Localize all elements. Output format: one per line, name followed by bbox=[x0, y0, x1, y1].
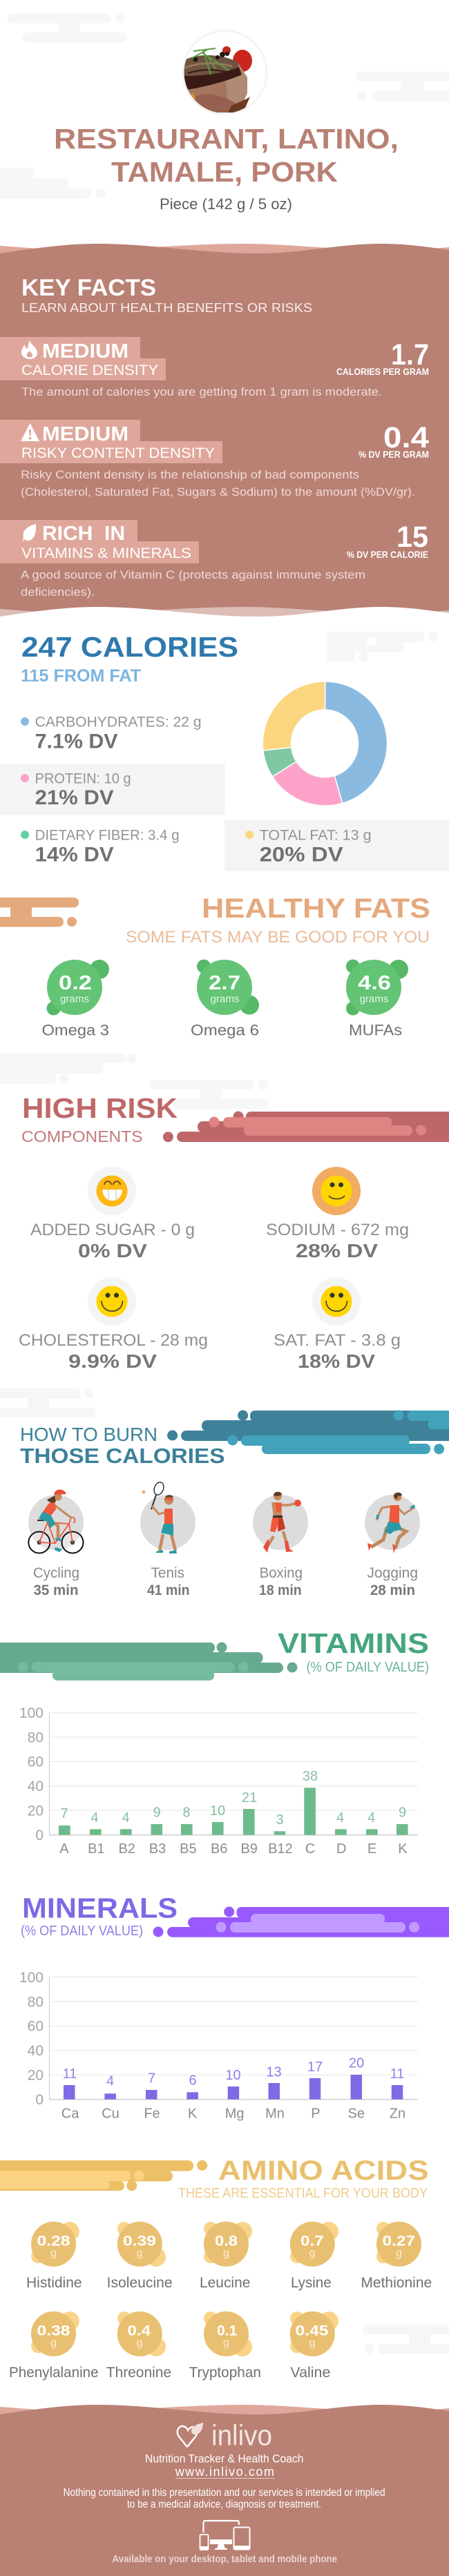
amino: histidine: g bbox=[50, 2247, 57, 2259]
bar chart: vitamins: B9 bbox=[240, 1841, 258, 1857]
legend: carbohydrates: 7.1% DV bbox=[35, 730, 118, 753]
decoration: minerals banner bbox=[153, 1907, 449, 1937]
title bbox=[54, 123, 399, 188]
amino: tryptophan: g bbox=[223, 2337, 229, 2349]
disclaimer: to be a medical advice, diagnosis or treatment. bbox=[127, 2499, 321, 2510]
bar chart: vitamins: 20 bbox=[28, 1803, 44, 1819]
icon: flame bbox=[21, 340, 37, 359]
activity: boxing: 18 min bbox=[259, 1582, 302, 1598]
amino: valine: g bbox=[309, 2337, 315, 2349]
activity: cycling: Cycling bbox=[33, 1565, 79, 1581]
amino: isoleucine bbox=[107, 2222, 173, 2291]
bar chart: minerals: Fe bbox=[144, 2107, 160, 2122]
bar chart: minerals: 20 bbox=[28, 2067, 44, 2083]
legend: total fat: 20% DV bbox=[260, 843, 343, 866]
background cloud: calories bbox=[327, 632, 438, 662]
bar chart: vitamins: 80 bbox=[28, 1730, 44, 1745]
bar chart: minerals: 10 bbox=[225, 2068, 241, 2083]
panel: key facts bbox=[0, 244, 449, 623]
badge: omega 6: grams bbox=[210, 993, 239, 1005]
bar chart: minerals: 6 bbox=[189, 2073, 197, 2088]
bar chart: vitamins: 40 bbox=[28, 1779, 44, 1794]
activity: boxing bbox=[253, 1492, 308, 1598]
bar chart: minerals: 60 bbox=[28, 2019, 44, 2035]
key facts heading bbox=[21, 275, 312, 315]
icon: devices bbox=[200, 2521, 250, 2550]
icon: boxer bbox=[263, 1492, 301, 1553]
item: added sugar: ADDED SUGAR - 0 g bbox=[30, 1221, 195, 1239]
bar chart: vitamins: K bbox=[398, 1841, 408, 1857]
amino: isoleucine: Isoleucine bbox=[107, 2275, 173, 2291]
calories heading: 247 CALORIES bbox=[21, 631, 238, 663]
icon: runner bbox=[367, 1493, 415, 1553]
item: added sugar bbox=[30, 1167, 195, 1261]
amino: threonine bbox=[106, 2312, 171, 2381]
amino: phenylalanine: 0.38 bbox=[37, 2323, 70, 2338]
bar chart: vitamins: 3 bbox=[276, 1812, 284, 1828]
background cloud: above high risk banner bbox=[149, 1080, 269, 1109]
background cloud: below healthy fats bbox=[0, 1054, 136, 1084]
bar chart: vitamins: D bbox=[336, 1841, 346, 1857]
bar chart: minerals: Ca bbox=[61, 2107, 79, 2122]
subheading: (% OF DAILY VALUE) bbox=[21, 1924, 143, 1939]
fact: calorie density: CALORIE DENSITY bbox=[21, 362, 158, 378]
icon: tennis player bbox=[142, 1481, 177, 1553]
fact: rich in vitamins and minerals: A good source of Vitamin C (protects against immune system bbox=[21, 568, 365, 581]
bar chart: minerals: 0 bbox=[35, 2092, 44, 2108]
bar chart: vitamins: 38 bbox=[303, 1769, 318, 1784]
footer bbox=[0, 2405, 449, 2576]
disclaimer bbox=[64, 2487, 385, 2510]
fact: risky content density: 0.4 bbox=[383, 421, 429, 454]
amino: phenylalanine bbox=[9, 2312, 99, 2381]
legend: total fat bbox=[224, 820, 449, 871]
bar chart: minerals: 11 bbox=[63, 2066, 77, 2082]
fact: rich in vitamins and minerals: VITAMINS & MINERALS bbox=[21, 545, 191, 561]
bar chart: vitamins: 21 bbox=[242, 1790, 257, 1805]
item: sodium bbox=[266, 1167, 409, 1261]
amino: lysine: 0.7 bbox=[300, 2234, 323, 2249]
amino: methionine: 0.27 bbox=[383, 2234, 415, 2249]
subheading: SOME FATS MAY BE GOOD FOR YOU bbox=[126, 928, 430, 947]
amino: valine: 0.45 bbox=[296, 2323, 329, 2338]
bar chart: minerals: 40 bbox=[28, 2043, 44, 2059]
activity: jogging: 28 min bbox=[370, 1582, 415, 1598]
background cloud: top left bbox=[8, 14, 127, 42]
fact: calorie density: MEDIUM bbox=[42, 340, 128, 362]
fact: rich in vitamins and minerals: RICH IN bbox=[42, 523, 125, 545]
item: added sugar: 0% DV bbox=[78, 1240, 147, 1261]
key facts heading: KEY FACTS bbox=[21, 275, 156, 301]
legend: carbohydrates: CARBOHYDRATES: 22 g bbox=[35, 715, 202, 730]
bar chart: minerals: 4 bbox=[106, 2074, 114, 2089]
amino: valine bbox=[290, 2312, 338, 2381]
website link: www.inlivo.com bbox=[175, 2465, 274, 2479]
bar chart: minerals: K bbox=[188, 2107, 198, 2122]
amino: phenylalanine: Phenylalanine bbox=[9, 2365, 99, 2381]
legend: dietary fiber: DIETARY FIBER: 3.4 g bbox=[35, 828, 180, 844]
food photo bbox=[182, 30, 268, 115]
bar chart: vitamins: B1 bbox=[88, 1841, 105, 1857]
title: RESTAURANT, LATINO, bbox=[54, 123, 399, 155]
panel: high risk components bbox=[19, 1092, 449, 1372]
background cloud: above burn section bbox=[0, 1388, 96, 1417]
amino: methionine bbox=[361, 2222, 432, 2291]
bar chart: vitamins: C bbox=[305, 1841, 315, 1857]
amino: phenylalanine: g bbox=[50, 2337, 57, 2349]
background cloud: right of amino acids bbox=[362, 2325, 449, 2354]
decoration: high risk banner bbox=[163, 1112, 449, 1142]
heading: HEALTHY FATS bbox=[202, 893, 430, 924]
donut chart bbox=[262, 681, 388, 806]
amino: lysine: Lysine bbox=[291, 2275, 332, 2291]
bar chart: vitamins: B5 bbox=[180, 1841, 197, 1857]
badge: mufas: grams bbox=[359, 993, 388, 1005]
fact: calorie density: 1.7 bbox=[391, 338, 429, 371]
amino: threonine: Threonine bbox=[106, 2365, 171, 2381]
bar chart: minerals: 80 bbox=[28, 1994, 44, 2010]
bar chart: vitamins: 100 bbox=[19, 1705, 44, 1721]
disclaimer: Nothing contained in this presentation and our services is intended or implied bbox=[64, 2487, 385, 2499]
amino: methionine: Methionine bbox=[361, 2275, 432, 2291]
bar chart: vitamins: 60 bbox=[28, 1754, 44, 1770]
activity: cycling: 35 min bbox=[33, 1582, 79, 1598]
item: saturated fat: 18% DV bbox=[298, 1350, 375, 1372]
bar chart: minerals: Cu bbox=[102, 2107, 120, 2122]
amino: tryptophan: 0.1 bbox=[217, 2323, 238, 2338]
subheading: COMPONENTS bbox=[21, 1127, 142, 1145]
bar chart: minerals bbox=[19, 1970, 418, 2122]
bar chart: vitamins: 7 bbox=[60, 1806, 68, 1821]
heading: THOSE CALORIES bbox=[20, 1444, 225, 1468]
panel: amino acids bbox=[0, 2156, 432, 2381]
activity: cycling bbox=[28, 1489, 84, 1598]
logo: inlivo: inlivo bbox=[211, 2419, 272, 2452]
bar chart: minerals: 7 bbox=[148, 2071, 155, 2086]
item: cholesterol bbox=[19, 1277, 208, 1372]
bar chart: vitamins: 10 bbox=[210, 1803, 225, 1819]
badge: omega 6: Omega 6 bbox=[191, 1022, 259, 1038]
logo: inlivo bbox=[178, 2419, 272, 2452]
activity: jogging: Jogging bbox=[367, 1565, 418, 1581]
fact: risky content density: (Cholesterol, Saturated Fat, Sugars & Sodium) to the amount (%DV/gr). bbox=[21, 485, 415, 498]
serving size: Piece (142 g / 5 oz) bbox=[160, 195, 292, 213]
icon: smiling face bbox=[97, 1286, 127, 1317]
heading bbox=[20, 1424, 225, 1468]
decoration: vitamins banner bbox=[0, 1642, 297, 1681]
panel: minerals bbox=[19, 1892, 449, 2122]
bar chart: vitamins: A bbox=[59, 1841, 69, 1857]
amino: lysine: g bbox=[309, 2247, 315, 2259]
icon: cyclist bbox=[28, 1489, 83, 1553]
subheading: THESE ARE ESSENTIAL FOR YOUR BODY bbox=[178, 2186, 428, 2201]
legend: dietary fiber bbox=[21, 828, 180, 866]
item: cholesterol: 9.9% DV bbox=[68, 1350, 157, 1372]
badge: mufas: 4.6 bbox=[358, 972, 391, 994]
amino: leucine: 0.8 bbox=[215, 2234, 238, 2249]
bar chart: vitamins bbox=[19, 1705, 418, 1857]
fact: risky content density: % DV PER GRAM bbox=[359, 449, 429, 460]
panel: calories bbox=[0, 631, 449, 871]
subheading: (% OF DAILY VALUE) bbox=[307, 1660, 429, 1675]
amino: threonine: g bbox=[137, 2337, 142, 2349]
fact: rich in vitamins and minerals: 15 bbox=[397, 521, 428, 554]
amino: leucine: g bbox=[223, 2247, 229, 2259]
bar chart: vitamins: 9 bbox=[153, 1805, 161, 1821]
icon: smiling face bbox=[321, 1286, 352, 1317]
amino: histidine bbox=[26, 2222, 82, 2291]
heading: AMINO ACIDS bbox=[218, 2156, 429, 2186]
activity: tennis: 41 min bbox=[147, 1582, 189, 1598]
panel: vitamins bbox=[0, 1627, 429, 1857]
bar chart: vitamins: B2 bbox=[118, 1841, 135, 1857]
amino: methionine: g bbox=[396, 2247, 402, 2259]
decoration: burn banner bbox=[167, 1410, 449, 1454]
fact: calorie density: The amount of calories you are getting from 1 gram is moderate. bbox=[21, 385, 382, 398]
item: cholesterol: CHOLESTEROL - 28 mg bbox=[19, 1331, 208, 1350]
amino: tryptophan bbox=[189, 2312, 261, 2381]
legend: protein: PROTEIN: 10 g bbox=[35, 771, 131, 787]
activity: tennis bbox=[140, 1481, 195, 1598]
fact: rich in vitamins and minerals bbox=[0, 520, 428, 599]
amino: leucine bbox=[200, 2222, 252, 2291]
badge: omega 6: 2.7 bbox=[209, 972, 240, 994]
amino: tryptophan: Tryptophan bbox=[189, 2365, 261, 2381]
badge: mufas: MUFAs bbox=[349, 1022, 402, 1038]
activity: tennis: Tenis bbox=[151, 1565, 184, 1581]
bar chart: minerals: Zn bbox=[390, 2107, 405, 2122]
bar chart: minerals: 20 bbox=[349, 2056, 364, 2071]
heading: MINERALS bbox=[22, 1892, 178, 1924]
item: saturated fat: SAT. FAT - 3.8 g bbox=[274, 1331, 401, 1350]
bar chart: minerals: Se bbox=[348, 2107, 365, 2122]
badge: omega 3 bbox=[41, 960, 109, 1038]
badge: mufas bbox=[346, 960, 408, 1038]
key facts heading: LEARN ABOUT HEALTH BENEFITS OR RISKS bbox=[21, 301, 312, 315]
bar chart: vitamins: 9 bbox=[399, 1805, 406, 1821]
activity: jogging bbox=[365, 1493, 420, 1598]
bar chart: minerals: Mg bbox=[225, 2107, 244, 2122]
badge: omega 3: Omega 3 bbox=[41, 1022, 109, 1038]
bar chart: minerals: 13 bbox=[266, 2064, 282, 2080]
bar chart: vitamins: B12 bbox=[268, 1841, 293, 1857]
amino: lysine bbox=[290, 2222, 338, 2291]
icon: grinning face bbox=[97, 1175, 127, 1207]
heading: HIGH RISK bbox=[22, 1092, 178, 1124]
tagline: Nutrition Tracker & Health Coach bbox=[145, 2452, 304, 2466]
bar chart: vitamins: B3 bbox=[149, 1841, 166, 1857]
amino: histidine: 0.28 bbox=[37, 2234, 70, 2249]
availability note: Available on your desktop, tablet and mobile phone bbox=[112, 2553, 337, 2565]
fact: calorie density bbox=[0, 337, 429, 398]
item: saturated fat bbox=[274, 1277, 401, 1372]
activity: boxing: Boxing bbox=[260, 1565, 303, 1581]
legend: protein: 21% DV bbox=[35, 786, 114, 809]
legend: protein bbox=[0, 764, 225, 815]
bar chart: vitamins: E bbox=[367, 1841, 376, 1857]
heading: HOW TO BURN bbox=[20, 1424, 157, 1445]
fact: rich in vitamins and minerals: % DV PER CALORIE bbox=[347, 550, 428, 560]
panel: healthy fats bbox=[0, 893, 430, 1038]
fact: risky content density: RISKY CONTENT DENSITY bbox=[21, 445, 215, 461]
fact: risky content density bbox=[0, 420, 429, 498]
bar chart: vitamins: B6 bbox=[211, 1841, 227, 1857]
background cloud: top right bbox=[356, 72, 449, 101]
badge: omega 3: grams bbox=[60, 993, 89, 1005]
icon: smiling face bbox=[321, 1175, 352, 1207]
decoration: healthy fats banner bbox=[0, 898, 79, 927]
badge: omega 6 bbox=[191, 960, 259, 1038]
legend: total fat: TOTAL FAT: 13 g bbox=[260, 828, 372, 844]
item: sodium: SODIUM - 672 mg bbox=[266, 1221, 409, 1239]
icon: warning triangle bbox=[21, 423, 39, 441]
fact: calorie density: CALORIES PER GRAM bbox=[336, 367, 429, 377]
bar chart: vitamins: 4 bbox=[122, 1810, 130, 1826]
bar chart: vitamins: 4 bbox=[367, 1810, 375, 1826]
amino: valine: Valine bbox=[290, 2365, 330, 2381]
bar chart: minerals: 100 bbox=[19, 1970, 44, 1986]
decoration: amino acids banner bbox=[0, 2160, 207, 2191]
title: TAMALE, PORK bbox=[111, 156, 338, 188]
badge: omega 3: 0.2 bbox=[59, 972, 92, 994]
fact: risky content density: MEDIUM bbox=[42, 423, 128, 445]
legend: dietary fiber: 14% DV bbox=[35, 843, 114, 866]
amino: isoleucine: g bbox=[137, 2247, 142, 2259]
bar chart: vitamins: 4 bbox=[90, 1810, 99, 1826]
bar chart: minerals: P bbox=[311, 2107, 321, 2122]
bar chart: vitamins: 8 bbox=[182, 1805, 191, 1821]
amino: isoleucine: 0.39 bbox=[123, 2234, 156, 2249]
heading: VITAMINS bbox=[278, 1627, 429, 1659]
calories from fat: 115 FROM FAT bbox=[21, 666, 141, 686]
background cloud: left of serving text bbox=[0, 168, 106, 199]
bar chart: minerals: Mn bbox=[265, 2107, 285, 2122]
icon: leaf bbox=[23, 524, 36, 541]
bar chart: vitamins: 4 bbox=[336, 1810, 344, 1826]
bar chart: minerals: 17 bbox=[307, 2060, 323, 2075]
amino: leucine: Leucine bbox=[200, 2275, 250, 2291]
legend: carbohydrates bbox=[21, 715, 202, 753]
item: sodium: 28% DV bbox=[296, 1240, 378, 1261]
amino: histidine: Histidine bbox=[26, 2275, 82, 2291]
amino: threonine: 0.4 bbox=[127, 2323, 151, 2338]
fact: rich in vitamins and minerals: deficiencies). bbox=[21, 585, 95, 599]
bar chart: vitamins: 0 bbox=[35, 1828, 44, 1843]
panel: how to burn those calories bbox=[20, 1410, 449, 1598]
fact: risky content density: Risky Content density is the relationship of bad components bbox=[21, 468, 359, 481]
bar chart: minerals: 11 bbox=[390, 2066, 404, 2082]
